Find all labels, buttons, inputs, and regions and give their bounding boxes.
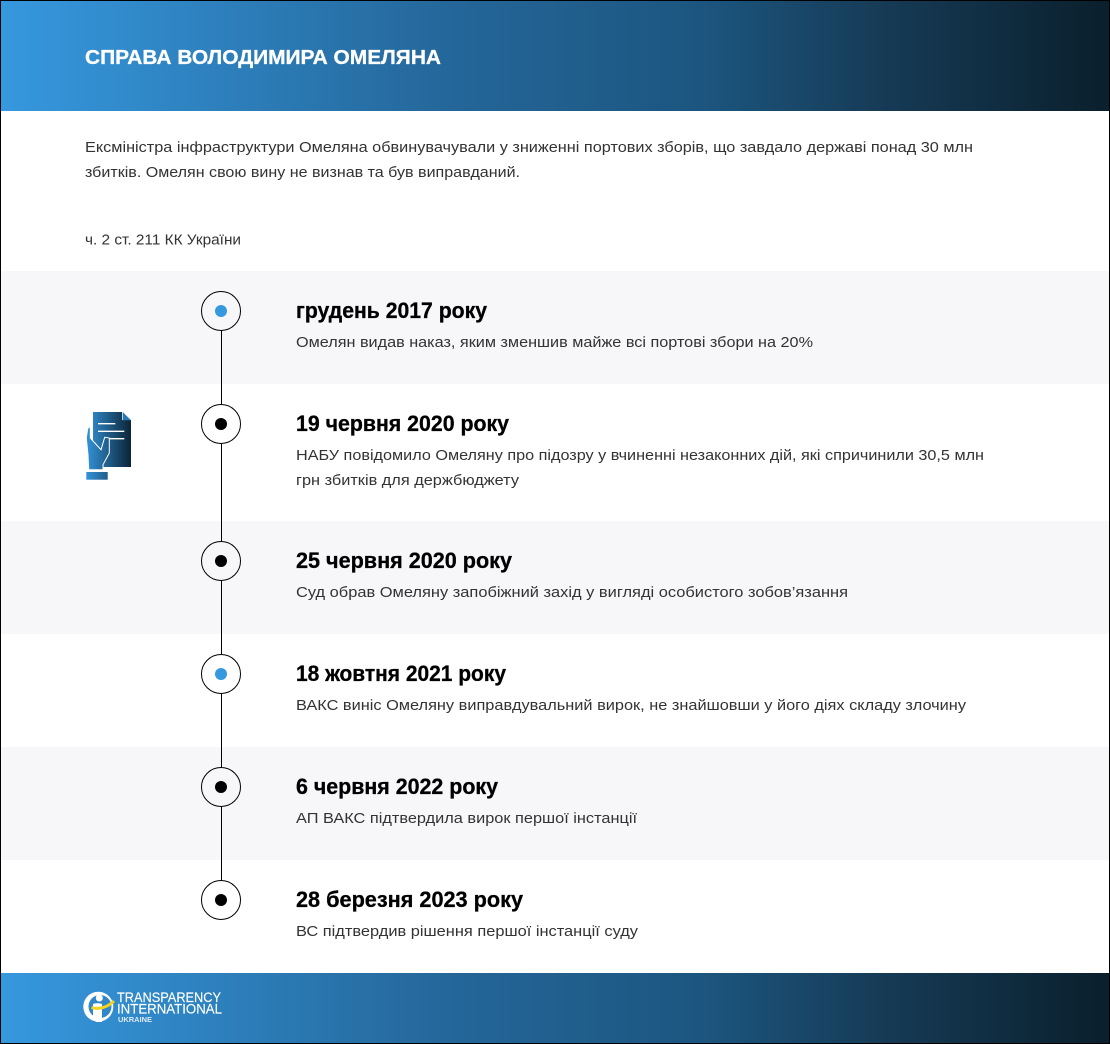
event: 25 June 2020: 25 червня 2020 року [296, 548, 513, 573]
event: December 2017 [202, 292, 813, 351]
event: 28 March 2023: 28 березня 2023 року [296, 887, 524, 912]
intro text line 2: збитків. Омелян свою вину не визнав та був виправданий. [85, 164, 520, 181]
event: 18 October 2021 [202, 654, 967, 714]
intro text: Ексміністра інфраструктури Омеляна обвинувачували у зниженні портових зборів, що завдало державі понад 30 млн [85, 139, 973, 156]
event: December 2017: Омелян видав наказ, яким зменшив майже всі портові збори на 20% [296, 334, 813, 351]
icon: hand holding document [86, 412, 131, 480]
event: 25 June 2020 [202, 542, 848, 601]
header band [0, 0, 1110, 111]
event: 6 June 2022: 6 червня 2022 року [296, 774, 499, 799]
event: 18 October 2021: 18 жовтня 2021 року [296, 661, 507, 686]
legal article: ч. 2 ст. 211 КК України [85, 232, 241, 248]
logo: Transparency International Ukraine: INTERNATIONAL [117, 1002, 222, 1016]
logo: Transparency International Ukraine: TRANSPARENCY [117, 990, 221, 1005]
event: 19 June 2020: грн збитків для держбюджету [296, 472, 520, 489]
logo: Transparency International Ukraine [83, 990, 222, 1024]
event: 19 June 2020 [202, 404, 984, 489]
event: December 2017: грудень 2017 року [296, 298, 488, 323]
logo: Transparency International Ukraine: UKRAINE [118, 1017, 152, 1024]
event: 6 June 2022: АП ВАКС підтвердила вирок першої інстанції [296, 810, 638, 827]
event: 28 March 2023 [202, 880, 639, 940]
event: 25 June 2020: Суд обрав Омеляну запобіжний захід у вигляді особистого зобов’язання [296, 584, 848, 601]
footer band [0, 973, 1110, 1044]
event: 6 June 2022 [202, 768, 638, 827]
title: СПРАВА ВОЛОДИМИРА ОМЕЛЯНА [85, 46, 441, 69]
event: 18 October 2021: ВАКС виніс Омеляну виправдувальний вирок, не знайшовши у його діях складу злочину [296, 697, 967, 714]
event: 19 June 2020: 19 червня 2020 року [296, 411, 510, 436]
timeline line [221, 311, 222, 900]
event: 28 March 2023: ВС підтвердив рішення першої інстанції суду [296, 923, 639, 940]
row backgrounds [0, 271, 1110, 860]
event: 19 June 2020: НАБУ повідомило Омеляну про підозру у вчиненні незаконних дій, які спричинили 30,5 млн [296, 447, 984, 464]
